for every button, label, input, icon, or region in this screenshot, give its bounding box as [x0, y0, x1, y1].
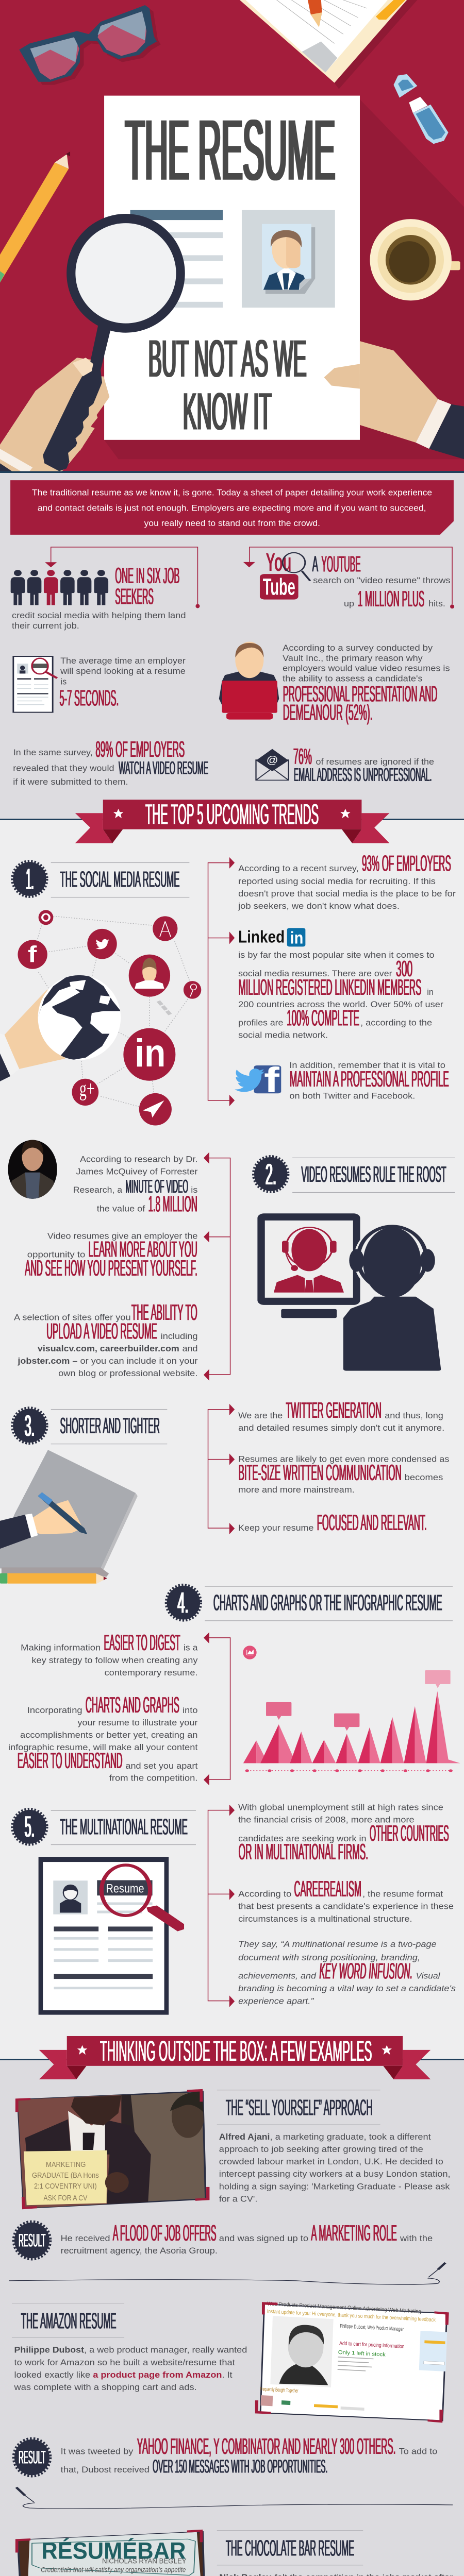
photo: chocolate bar resume: NICHOLAS RYAN BEGLEY: [102, 2557, 187, 2565]
resume paper: [104, 96, 360, 440]
trend 2 text: video value: Research, a: [73, 1185, 122, 1195]
trend 1 text: social media stats: 300: [396, 957, 412, 981]
squiggle divider with pen: [9, 2263, 445, 2284]
stat: five to seven seconds: The average time an employer: [60, 656, 186, 666]
trend 3 heading: [12, 1408, 167, 1444]
example 1: sell yourself: [217, 2090, 451, 2204]
icon: notebook and pencil: [240, 0, 417, 89]
screenshot: amazon product page resume: [255, 2300, 449, 2423]
icon: usb stick: [393, 74, 449, 144]
trend 4 text: infographic resume: Incorporating: [27, 1705, 82, 1715]
icon: twitter node: [87, 929, 117, 959]
trend 3 text: shorter resumes: and thus, long: [385, 1411, 443, 1420]
icon: google plus node: [72, 1077, 98, 1106]
icon: person with laptop: [219, 642, 279, 720]
intro panel: you really need to stand out from the crowd.: [144, 518, 320, 528]
result 1: RESULT: [19, 2231, 45, 2251]
intro panel: [10, 480, 454, 535]
result 2: It was tweeted by: [61, 2447, 134, 2456]
squiggle divider with pen: [16, 2487, 453, 2509]
trend 2 text: video value: the value of: [97, 1204, 145, 1213]
trend 2 text: upload sites: [14, 1300, 209, 1381]
trend 2 text: upload sites: own blog or professional website.: [58, 1368, 197, 1378]
trend 3 text: shorter resumes: becomes: [405, 1472, 443, 1482]
trend 5 text: multinational resume: candidates are seeking work in: [238, 1834, 367, 1843]
trend 2 heading: 2.: [266, 1158, 276, 1191]
trend 1 heading: 1.: [26, 862, 34, 895]
icon: compass node: [153, 916, 177, 941]
example 3: chocolate bar resume: [217, 2530, 453, 2576]
example 2: amazon resume: THE AMAZON RESUME: [21, 2309, 117, 2333]
icon: pencil: [0, 151, 70, 282]
trend 5 heading: [12, 1809, 196, 1845]
illustration: resume under magnifier: [39, 1857, 184, 2015]
trend 2 heading: [254, 1157, 455, 1193]
trend 4 text: infographic resume: is a: [184, 1643, 198, 1652]
text: MINUTE OF VIDEO: [125, 1176, 188, 1197]
icon: linkedin logo: in: [290, 928, 303, 947]
example 1: sell yourself: Alfred Ajani: [219, 2132, 270, 2142]
text: 1.8 MILLION: [148, 1192, 197, 1216]
illustration: resume under magnifier: Resume: [106, 1882, 144, 1895]
icon: person node: [129, 955, 170, 997]
photo: chocolate bar resume: Credentials that will satisfy any organization's appetite: [41, 2566, 186, 2574]
subtitle: but not as we know it: [148, 330, 307, 441]
example 2: amazon resume: a product page from Amazon: [93, 2370, 222, 2380]
icon: paper plane node: [139, 1093, 172, 1126]
icon: resume with magnifier: [13, 656, 57, 713]
result 1: with the: [400, 2233, 433, 2243]
photo: chocolate bar resume: RÉSUMÉBAR: [41, 2538, 186, 2564]
hero paper shadow: [104, 99, 464, 459]
photo sign: MARKETING: [46, 2160, 86, 2168]
stat: vault survey: Vault Inc., the primary reason why: [283, 653, 423, 663]
icon: glasses: [19, 5, 161, 85]
stat: 89% of employers: revealed that they would: [13, 764, 114, 773]
stat: youtube search: A: [312, 552, 318, 577]
icon: youtube logo: You: [266, 548, 291, 577]
trend 5 text: multinational resume: achievements, and: [238, 1971, 317, 1981]
example 2: amazon resume: , a web product manager, really wanted: [84, 2345, 247, 2355]
trend 2 portrait: james mcquivey: [7, 1140, 58, 1199]
screenshot: amazon product page resume: Add to cart for pricing information: [339, 2340, 405, 2349]
trend 2 text: upload sites: jobster.com –: [18, 1356, 77, 1366]
trend 1 text: social media stats: in: [427, 987, 434, 997]
icon: gear node: [39, 910, 53, 925]
trend 2 text: video value: According to research by Dr.: [80, 1155, 197, 1164]
photo sign: [24, 2150, 107, 2205]
icon: red interviewer: [274, 1227, 344, 1293]
photo sign: 2:1 COVENTRY UNI): [34, 2182, 97, 2190]
trend 4 text: infographic resume: into: [183, 1705, 197, 1715]
trend 1 text: social media stats: on both Twitter and Facebook.: [289, 1091, 415, 1101]
icon: coffee cup: [370, 219, 460, 300]
icon: youtube logo: [260, 548, 310, 600]
text: EASIER TO DIGEST: [104, 1631, 180, 1655]
stat: youtube search: up: [344, 599, 354, 608]
result 2: RESULT: [19, 2448, 45, 2468]
trend 5 text: multinational resume: experience apart.”: [238, 1996, 314, 2006]
photo: marketing graduate with sign: [15, 2089, 209, 2209]
ribbon heading: thinking outside the box: [39, 2035, 430, 2079]
result 1: recruitment agency, the Asoria Group.: [61, 2246, 218, 2256]
trend 1 text: social media stats: [208, 852, 456, 1106]
trend 4 text: infographic resume: [8, 1631, 230, 1785]
trend 4 heading: [166, 1585, 453, 1621]
trend 3 text: shorter resumes: [208, 1398, 449, 1535]
icon: chain link: [158, 1001, 170, 1014]
stat: one in six job seekers: credit social media with helping them land: [12, 611, 186, 620]
result 1: [13, 2221, 433, 2259]
icon: youtube logo: Tube: [263, 574, 295, 600]
illustration: video interview: [257, 1213, 441, 1371]
trend 2 text: upload sites: A selection of sites offer you: [14, 1313, 131, 1323]
trend 4 text: infographic resume: contemporary resume.: [105, 1668, 197, 1677]
icon: linkedin logo: Linked: [238, 927, 285, 946]
trend 5 heading: 5.: [25, 1810, 35, 1843]
example 2: amazon resume: was complete with a shopping cart and ads.: [14, 2382, 197, 2392]
trend 2 text: upload sites: or you can include it on your: [80, 1356, 197, 1366]
stat: five to seven seconds: 5-7 SECONDS.: [59, 686, 119, 710]
trend 4 text: infographic resume: accomplishments or better yet, creating an: [20, 1730, 197, 1740]
trend 5 text: multinational resume: circumstances is a multinational structure.: [238, 1914, 412, 1924]
trend 5 text: multinational resume: [208, 1803, 456, 2007]
ribbon heading: top 5 upcoming trends: [75, 799, 389, 843]
text: SHORTER AND TIGHTER: [60, 1414, 160, 1438]
text: UPLOAD A VIDEO RESUME: [46, 1319, 157, 1344]
stat: one in six job seekers: SEEKERS: [115, 584, 154, 609]
stat: five to seven seconds: [13, 656, 186, 713]
stat: five to seven seconds: is: [61, 677, 67, 686]
icon: left hand holding magnifier: [0, 325, 112, 471]
icon: magnifying glass lens: [67, 214, 185, 333]
stat: 89% of employers: if it were submitted to them.: [13, 777, 128, 787]
icon: linkedin node: [123, 1028, 175, 1081]
icon: twitter and facebook: [235, 1060, 281, 1099]
icon: twitter and facebook: f: [264, 1060, 280, 1099]
trend 2 text: upload sites: visualcv.com, careerbuilder.com: [38, 1344, 179, 1353]
trend 4 text: infographic resume: your resume to illustrate your: [77, 1718, 197, 1727]
icon: envelope: [256, 749, 289, 780]
stat: youtube search: [243, 547, 454, 612]
icon: resume photo: [242, 210, 335, 308]
illustration: hand writing on paper: [0, 1450, 138, 1584]
trend 2 text: video value: [25, 1152, 230, 1375]
trend 4 text: infographic resume: infographic resume, will make all your content: [8, 1743, 198, 1752]
photo sign: GRADUATE (BA Hons: [32, 2171, 99, 2179]
stat: 76% of resumes: [256, 744, 434, 785]
result 2: that, Dubost received: [61, 2465, 150, 2475]
screenshot: amazon product page resume: Frequently Bought Together: [260, 2385, 299, 2394]
trend 1 text: social media stats: social media resumes. There are over: [238, 969, 392, 978]
trend 5 text: multinational resume: According to: [238, 1889, 291, 1899]
trend 2 text: video value: is: [191, 1185, 197, 1195]
icon: google plus node: g+: [79, 1077, 95, 1101]
icon: envelope: @: [267, 755, 278, 766]
trend 3 text: shorter resumes: more and more mainstream.: [238, 1485, 355, 1495]
icon: facebook node: f: [28, 942, 37, 967]
trend 1 text: social media stats: profiles are: [238, 1018, 283, 1028]
screenshot: amazon product page resume: Only 1 left in stock: [338, 2349, 386, 2358]
illustration: social network and globe: [18, 910, 201, 1107]
illustration: globe in hand: [0, 974, 121, 1081]
trend 2 text: video value: opportunity to: [27, 1250, 85, 1260]
result 1: He received: [61, 2233, 110, 2243]
photo: chocolate bar resume: [15, 2530, 209, 2576]
stat: youtube search: hits.: [428, 599, 445, 608]
trend 1 text: social media stats: , according to the: [360, 1018, 432, 1028]
stat: one in six job seekers: [11, 547, 200, 631]
trend 4 text: infographic resume: key strategy to follow when creating any: [31, 1655, 198, 1665]
trend 3 heading: 3.: [25, 1409, 35, 1442]
text: 89% OF EMPLOYERS: [95, 737, 185, 762]
text: CHARTS AND GRAPHS: [86, 1693, 179, 1718]
trend 2 text: upload sites: including: [161, 1332, 197, 1341]
example 2: amazon resume: [12, 2303, 247, 2392]
example 2: amazon resume: looked exactly like: [14, 2370, 90, 2380]
text: WATCH A VIDEO RESUME: [119, 758, 208, 778]
icon: right hand holding paper: [324, 341, 464, 459]
stat: 89% of employers: [13, 737, 208, 787]
resume paper text lines: [118, 210, 223, 308]
trend 5 text: multinational resume: Visual: [416, 1971, 441, 1981]
trend 2 text: upload sites: and: [183, 1344, 197, 1353]
trend 1 heading: [12, 861, 189, 897]
icon: search node: [184, 981, 201, 999]
stat: five to seven seconds: will spend looking at a resume: [60, 667, 186, 676]
trend 3 text: shorter resumes: We are the: [238, 1411, 283, 1420]
example 2: amazon resume: . It: [222, 2370, 233, 2380]
trend 1 text: social media stats: social media network.: [238, 1030, 328, 1040]
trend 1 text: social media stats: job seekers, we don't know what does.: [238, 902, 400, 911]
icon: navy candidate: [343, 1224, 441, 1371]
trend 3 text: shorter resumes: Keep your resume: [238, 1523, 313, 1533]
icon: linkedin node: in: [135, 1031, 165, 1075]
stat: 89% of employers: In the same survey,: [13, 748, 93, 757]
stat: 76% of resumes: 76%: [293, 744, 312, 769]
chart: peaks infographic: [243, 1646, 460, 1771]
example 2: amazon resume: Philippe Dubost: [14, 2345, 84, 2355]
result 2: To add to: [399, 2447, 437, 2456]
icon: facebook node: [18, 940, 47, 969]
trend 4 text: infographic resume: and set you apart: [125, 1761, 198, 1771]
photo sign: ASK FOR A CV: [43, 2194, 87, 2202]
result 1: and was signed up to: [219, 2233, 308, 2243]
example 2: amazon resume: to work for Amazon so he built a website/resume that: [14, 2358, 235, 2367]
trend 1 text: social media stats: According to a recent survey,: [238, 864, 359, 873]
trend 4 text: infographic resume: EASIER TO UNDERSTAND: [18, 1749, 123, 1773]
stat: vault survey: [219, 642, 450, 725]
icon: chart badge: [243, 1646, 257, 1659]
trend 2 text: video value: James McQuivey of Forrester: [76, 1167, 197, 1177]
trend 4 heading: 4.: [177, 1586, 189, 1619]
text: ONE IN SIX JOB: [115, 564, 179, 588]
trend 4 text: infographic resume: from the competition.: [109, 1773, 197, 1783]
trend 2 text: video value: Video resumes give an employer the: [47, 1231, 197, 1241]
result 2: [13, 2434, 437, 2477]
example 1: sell yourself: for a CV'.: [219, 2194, 257, 2204]
text: THE ABILITY TO: [131, 1300, 197, 1325]
trend 4 text: infographic resume: Making information: [21, 1643, 101, 1652]
stat: one in six job seekers: their current job.: [12, 621, 79, 631]
stat: vault survey: the ability to assess a candidate's: [283, 674, 423, 683]
